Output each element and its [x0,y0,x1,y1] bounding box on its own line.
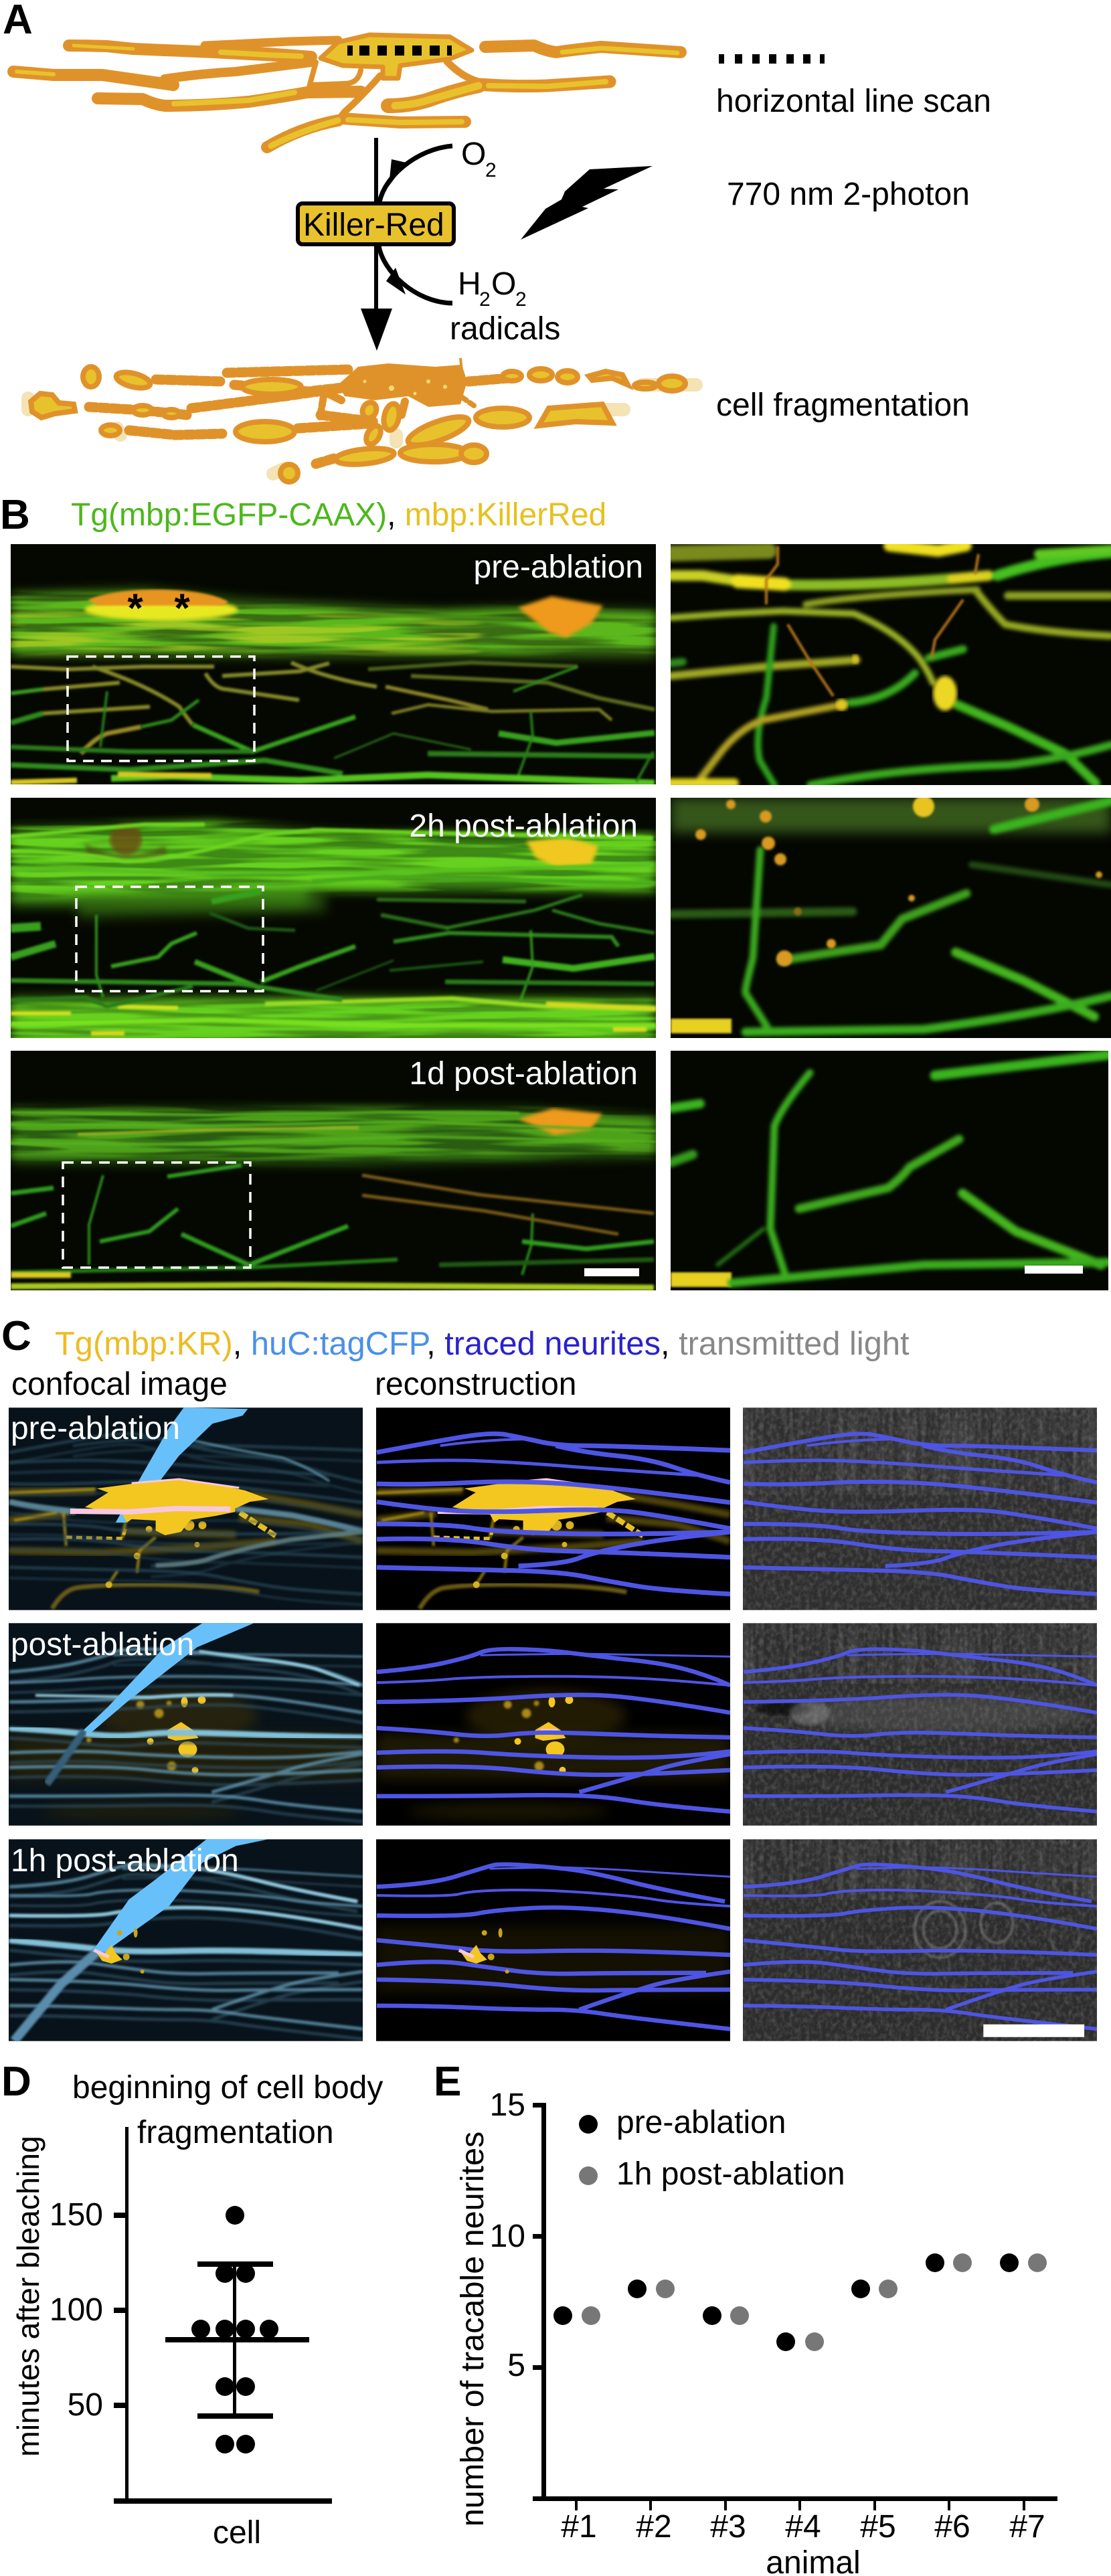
x tick labels: #7 [1009,2509,1045,2545]
image: 1d post-ablation overview [11,1051,656,1290]
series: 1h post-ablation [582,2253,1047,2351]
dashed inset box [63,1163,250,1268]
panel B: live imaging [0,492,1111,1290]
main arrow [361,138,392,351]
arrow: O2 consumed [379,146,452,202]
label: pre-ablation: pre-ablation [474,549,643,585]
icon: lightning bolt [521,166,653,240]
label: cell fragmentation: cell fragmentation [716,388,970,423]
y tick labels: 10 [490,2219,525,2254]
y tick labels: 50 [68,2387,103,2423]
reconstruction row 2 [376,1623,730,1826]
arrow: H2O2 released [379,246,452,303]
transmitted row 1 [743,1407,1097,1610]
y axis label: minutes after bleaching [11,2136,46,2457]
label: horizontal line scan: horizontal line scan [716,84,991,119]
label: O2: O [461,137,486,172]
x tick labels: #2 [636,2509,672,2545]
x tick labels: #4 [785,2509,821,2545]
image: 2h post-ablation overview [11,798,656,1038]
legend E [579,2105,845,2192]
panel letter E: E [434,2059,461,2105]
label: H2O2 radicals: 2 [515,288,527,311]
x tick labels [561,2509,1045,2545]
label: 1h post-ablation [11,1843,239,1879]
reconstruction row 1 [376,1407,730,1610]
image: pre-ablation inset [671,544,1111,785]
panel A: Killer-Red ablation schematic [3,0,991,482]
label: pre-ablation [11,1411,180,1446]
illustration: fragmented cell [28,358,696,482]
dashed inset box [76,887,263,991]
transmitted row 2 [743,1623,1097,1826]
image: 1d post-ablation inset [671,1051,1108,1290]
y axis label: number of tracable neurites [454,2132,491,2526]
x label: cell: cell [213,2515,261,2551]
series: pre-ablation [553,2253,1019,2351]
chart title [72,2070,383,2150]
legend E: pre-ablation [616,2105,786,2140]
confocal row 3 [9,1839,363,2041]
label: O2: 2 [485,159,497,181]
y tick labels: 150 [50,2197,103,2233]
label: 2h post-ablation: 2h post-ablation [409,808,638,844]
transmitted row 3 [743,1839,1097,2041]
illustration: intact oligodendrocyte [13,35,681,147]
scale bar [584,1268,639,1276]
heading: reconstruction: reconstruction [375,1367,576,1402]
label: H2O2 radicals: H [458,266,481,302]
x tick labels: #1 [561,2509,597,2545]
dashed inset box [68,657,254,761]
panel letter C: C [1,1313,31,1359]
x tick labels: #6 [934,2509,970,2545]
confocal row 1 [9,1407,363,1610]
legend C: Tg(mbp:KR), huC:tagCFP, traced neurites, transmitted light [55,1326,910,1362]
confocal row 2 [9,1623,363,1826]
panel C: reconstruction [1,1313,1097,2041]
panel letter B: B [0,492,30,538]
x tick labels: #5 [860,2509,896,2545]
label: H2O2 radicals: O [491,266,516,302]
y tick labels: 5 [507,2348,525,2383]
label: post-ablation [11,1627,194,1662]
y tick labels: 15 [490,2087,525,2123]
y tick labels: 100 [50,2292,103,2328]
panel E: traceable neurites chart [434,2059,1057,2576]
data points [191,2206,278,2454]
asterisks: * [174,586,190,630]
label: H2O2 radicals: 2 [479,288,491,311]
Killer-Red box: Killer-Red [303,207,444,243]
asterisks [127,586,190,630]
scale bar [1025,1266,1083,1274]
reconstruction row 3 [376,1839,730,2041]
y tick labels [490,2087,525,2383]
legend: horizontal line scan dashes [719,54,825,64]
panel letter D: D [1,2059,31,2105]
asterisks: * [127,586,143,630]
mean and error bars [165,2261,309,2419]
chart title: fragmentation [137,2115,334,2150]
label: 770 nm 2-photon: 770 nm 2-photon [727,177,970,212]
legend E: 1h post-ablation [616,2156,845,2192]
label: 1d post-ablation: 1d post-ablation [409,1056,638,1092]
scale bar [983,2025,1084,2037]
label: O2 [461,137,497,181]
panel D: fragmentation time chart [1,2059,383,2551]
heading: confocal image: confocal image [11,1367,228,1402]
y tick labels [50,2197,103,2423]
line scan marks on soma [347,46,452,56]
label: H2O2 radicals: radicals [450,311,560,347]
axes and ticks [533,2103,1057,2510]
image: 2h post-ablation inset [671,798,1111,1038]
legend B: Tg(mbp:EGFP-CAAX), mbp:KillerRed [71,497,606,533]
image: pre-ablation overview [11,544,656,784]
label: H2O2 radicals [450,266,560,347]
x tick labels: #3 [710,2509,746,2545]
chart title: beginning of cell body [72,2070,383,2106]
axes and ticks [114,2127,332,2504]
